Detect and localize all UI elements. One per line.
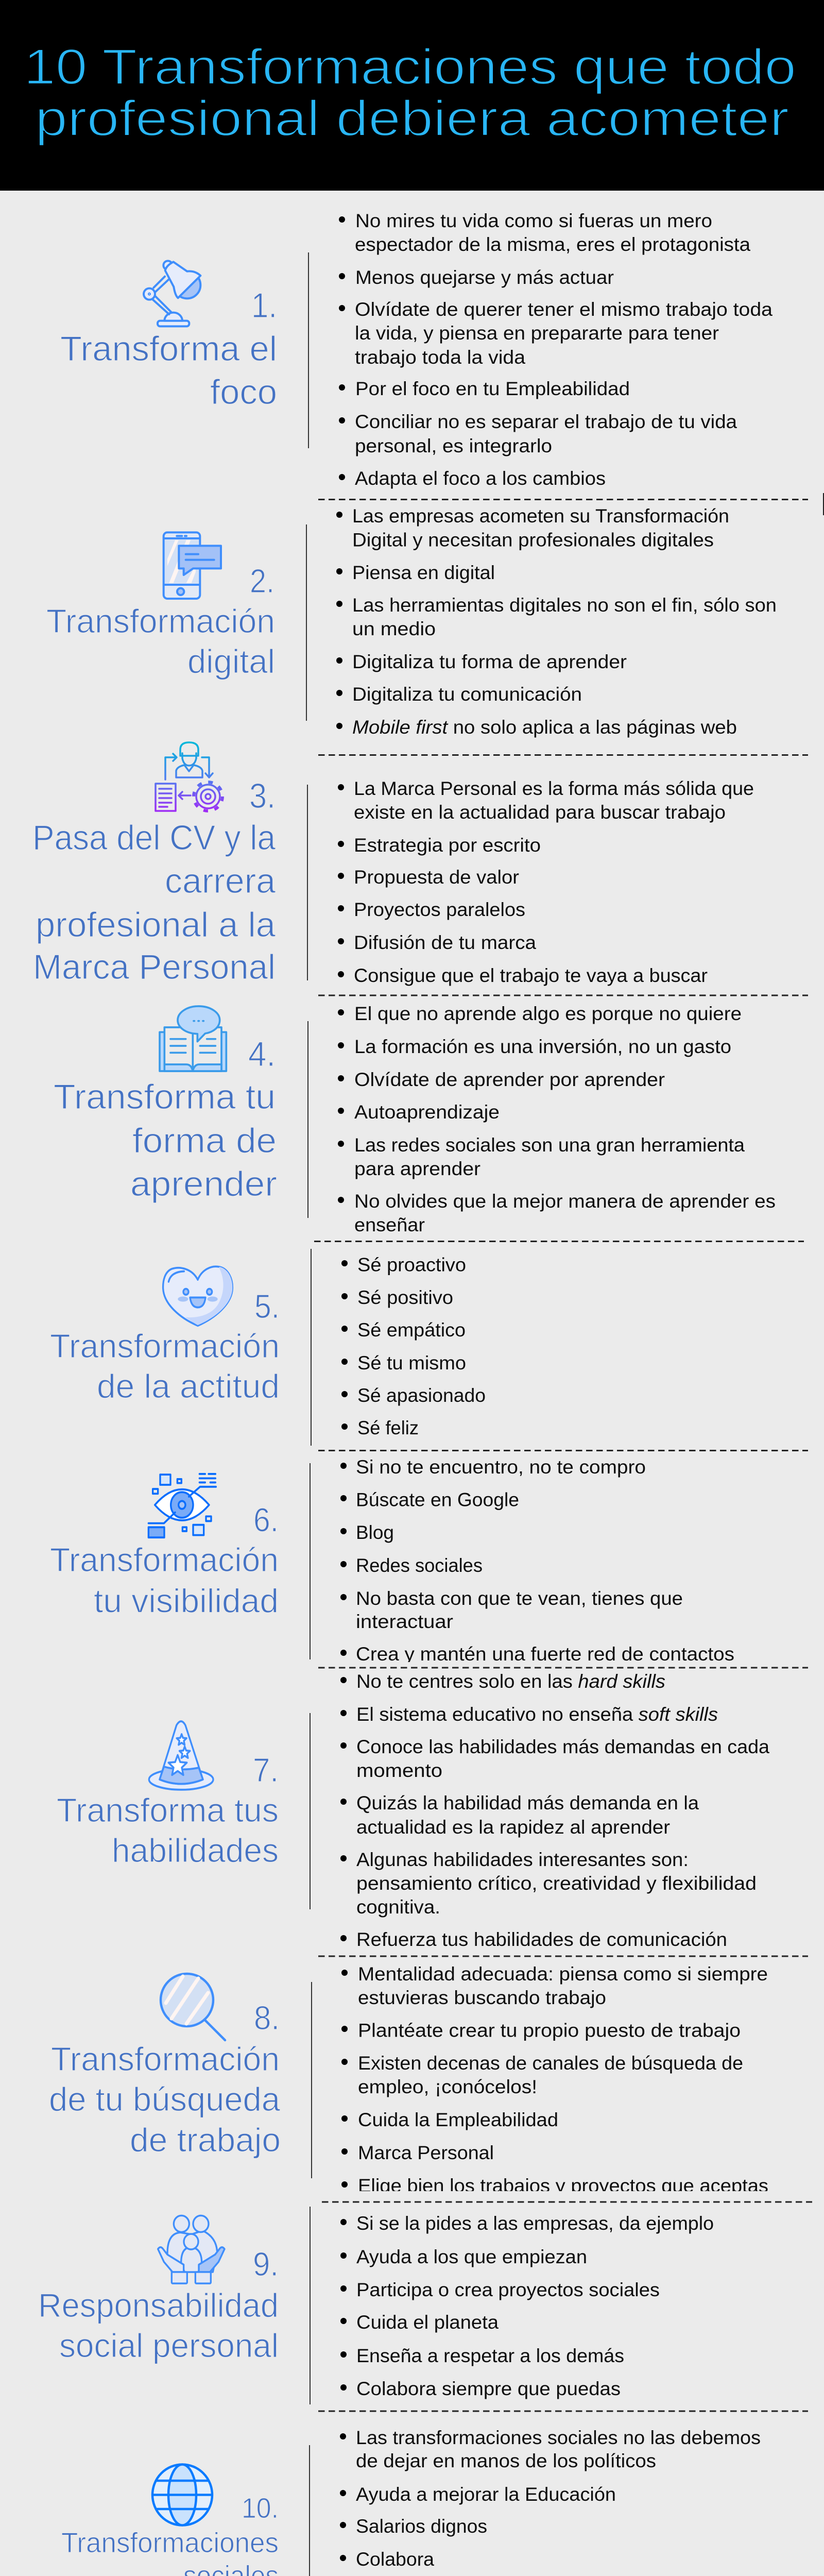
bullet list 5: Sé tu mismo	[357, 1352, 466, 1374]
bullet list 7: Algunas habilidades interesantes son:	[356, 1849, 689, 1870]
bullet list 6: interactuar	[356, 1611, 453, 1632]
heading 6: tu visibilidad	[94, 1582, 279, 1620]
title: profesional debiera acometer	[35, 90, 789, 146]
bullet list 9: Participa o crea proyectos sociales	[356, 2279, 660, 2300]
heading 2: 2.	[250, 562, 274, 600]
heading 4	[54, 1035, 277, 1204]
bullet list 7: cognitiva.	[356, 1896, 440, 1918]
heading 1: 1.	[251, 286, 277, 325]
bullet list 6: Si no te encuentro, no te compro	[356, 1456, 646, 1478]
heading 1	[60, 286, 277, 412]
bullet list 7: Quizás la habilidad más demanda en la	[356, 1792, 699, 1814]
bullet list 1	[339, 210, 772, 489]
bullet list 8: Existen decenas de canales de búsqueda de	[358, 2053, 743, 2074]
bullet list 1: Adapta el foco a los cambios	[355, 468, 606, 489]
bullet list 1: trabajo toda la vida	[355, 347, 525, 368]
bullet list 3: La Marca Personal es la forma más sólida que	[354, 778, 754, 799]
panel: section 5	[50, 1249, 486, 1446]
heading 3: Marca Personal	[33, 947, 276, 987]
panel: section 6	[50, 1456, 734, 1665]
icon: smiling heart	[163, 1266, 232, 1326]
bullet list 3: Estrategia por escrito	[354, 835, 541, 856]
bullet list 7	[340, 1671, 769, 1950]
heading 5: de la actitud	[97, 1367, 280, 1405]
bullet list 2: un medio	[352, 618, 436, 639]
bullet list 10	[340, 2427, 761, 2576]
bullet list 2: Digital y necesitan profesionales digitales	[352, 530, 714, 550]
bullet list 2: Mobile first no solo aplica a las páginas web	[352, 717, 737, 738]
bullet list 4: para aprender	[354, 1158, 480, 1179]
bullet list 9	[340, 2213, 714, 2399]
bullet list 4: La formación es una inversión, no un gasto	[354, 1036, 731, 1057]
panel: section 8	[49, 1963, 768, 2196]
bullet list 3: Proyectos paralelos	[354, 899, 525, 920]
bullet list 9: Ayuda a los que empiezan	[356, 2246, 587, 2267]
heading 2	[46, 562, 275, 680]
panel: section 3	[32, 742, 754, 987]
heading 8: 8.	[254, 1999, 280, 2037]
bullet list 10: Las transformaciones sociales no las debemos	[356, 2427, 761, 2448]
heading 4: 4.	[248, 1035, 276, 1074]
panel: section 4	[54, 1003, 776, 1235]
header banner	[0, 0, 824, 191]
bullet list 8: Cuida la Empleabilidad	[358, 2109, 558, 2130]
heading 7	[57, 1751, 279, 1869]
bullet list 10: Colabora	[356, 2549, 434, 2570]
bullet list 1: Conciliar no es separar el trabajo de tu vida	[355, 411, 737, 432]
bullet list 9: Cuida el planeta	[356, 2312, 499, 2333]
bullet list 7: No te centres solo en las hard skills	[356, 1671, 665, 1692]
heading 3: profesional a la	[36, 905, 276, 944]
bullet list 3: existe en la actualidad para buscar trabajo	[354, 802, 726, 823]
bullet list 8: Mentalidad adecuada: piensa como si siempre	[358, 1963, 768, 1985]
heading 5: 5.	[254, 1287, 280, 1325]
bullet list 4: No olvides que la mejor manera de aprender es	[354, 1191, 776, 1212]
bullet list 8: estuvieras buscando trabajo	[358, 1987, 606, 2008]
heading 9: Responsabilidad	[38, 2286, 279, 2324]
title: 10 Transformaciones que todo	[24, 39, 796, 95]
bullet list 4: enseñar	[354, 1214, 425, 1235]
bullet list 5: Sé feliz	[357, 1417, 419, 1438]
bullet list 6	[340, 1456, 734, 1665]
bullet list 3: Difusión de tu marca	[354, 932, 536, 953]
panel: section 10	[61, 2427, 761, 2576]
bullet list 4: Autoaprendizaje	[354, 1101, 500, 1123]
icon: magnifying glass	[161, 1974, 225, 2040]
bullet list 4: El que no aprende algo es porque no quiere	[354, 1003, 742, 1024]
icon: desk lamp	[144, 261, 200, 326]
heading 1: foco	[210, 372, 277, 412]
bullet list 6: No basta con que te vean, tienes que	[356, 1588, 683, 1609]
bullet list 1: la vida, y piensa en prepararte para tener	[355, 323, 719, 344]
bullet list 8: empleo, ¡conócelos!	[358, 2076, 537, 2097]
bullet list 5: Sé positivo	[357, 1287, 453, 1308]
bullet list 9: Enseña a respetar a los demás	[356, 2345, 624, 2366]
bullet list 2: Las empresas acometen su Transformación	[352, 505, 729, 527]
bullet list 3	[338, 778, 754, 986]
heading 8: de trabajo	[130, 2121, 281, 2159]
heading 6: Transformación	[50, 1541, 279, 1579]
panel: section 7	[57, 1671, 769, 1950]
bullet list 2: Las herramientas digitales no son el fin, sólo son	[352, 595, 777, 616]
bullet list 8	[341, 1963, 768, 2196]
icon: globe	[152, 2465, 212, 2526]
heading 5	[50, 1287, 280, 1405]
icon: person, CV and gear	[156, 742, 222, 811]
bullet list 6: Blog	[356, 1522, 394, 1543]
bullet list 5: Sé proactivo	[357, 1254, 466, 1276]
bullet list 9: Colabora siempre que puedas	[356, 2378, 621, 2399]
bullet list 4: Olvídate de aprender por aprender	[354, 1069, 665, 1090]
heading 8	[49, 1999, 281, 2159]
icon: wizard hat	[149, 1721, 213, 1790]
bullet list 9: Si se la pides a las empresas, da ejemplo	[356, 2213, 714, 2234]
heading 4: forma de	[132, 1121, 277, 1160]
heading 7: habilidades	[112, 1832, 279, 1869]
bullet list 2: Piensa en digital	[352, 562, 495, 583]
heading 1: Transforma el	[60, 329, 277, 368]
bullet list 7: momento	[356, 1760, 442, 1781]
icon: eye with data	[148, 1474, 216, 1537]
heading 5: Transformación	[50, 1327, 280, 1365]
heading 3: 3.	[249, 776, 276, 816]
bullet list 7: actualidad es la rapidez al aprender	[356, 1817, 670, 1838]
heading 10: 10.	[242, 2492, 279, 2524]
bullet list 5: Sé apasionado	[357, 1385, 486, 1406]
heading 4: Transforma tu	[54, 1077, 276, 1116]
heading 9	[38, 2245, 279, 2364]
heading 4: aprender	[130, 1164, 277, 1204]
bullet list 3: Consigue que el trabajo te vaya a buscar	[354, 965, 708, 986]
heading 9: social personal	[59, 2327, 279, 2364]
bullet list 7: pensamiento crítico, creatividad y flexibilidad	[356, 1873, 757, 1894]
heading 8: de tu búsqueda	[49, 2080, 281, 2118]
bullet list 10: Ayuda a mejorar la Educación	[356, 2484, 616, 2505]
bullet list 1: Menos quejarse y más actuar	[355, 267, 614, 288]
bullet list 5	[341, 1254, 486, 1438]
heading 3	[32, 776, 276, 987]
icon: phone with message	[164, 532, 221, 599]
bullet list 5: Sé empático	[357, 1319, 466, 1341]
heading 2: digital	[187, 642, 275, 680]
bullet list 1: Por el foco en tu Empleabilidad	[355, 378, 630, 399]
bullet list 4: Las redes sociales son una gran herramienta	[354, 1134, 745, 1156]
bullet list 8: Elige bien los trabajos y proyectos que aceptas	[358, 2175, 768, 2196]
bullet list 10: Salarios dignos	[356, 2516, 487, 2537]
heading 9: 9.	[253, 2245, 279, 2283]
bullet list 1: espectador de la misma, eres el protagonista	[355, 234, 750, 255]
bullet list 6: Búscate en Google	[356, 1489, 519, 1511]
bullet list 7: Refuerza tus habilidades de comunicación	[356, 1929, 727, 1950]
heading 8: Transformación	[51, 2040, 280, 2078]
bullet list 2: Digitaliza tu forma de aprender	[352, 651, 627, 672]
bullet list 4	[338, 1003, 776, 1235]
bullet list 1: personal, es integrarlo	[355, 435, 552, 456]
panel: section 1	[60, 210, 772, 489]
heading 3: Pasa del CV y la	[32, 818, 276, 857]
heading 7: Transforma tus	[57, 1791, 279, 1829]
heading 10: Transformaciones	[61, 2527, 279, 2558]
heading 6	[50, 1501, 279, 1620]
bullet list 8: Marca Personal	[358, 2142, 494, 2163]
bullet list 10: de dejar en manos de los políticos	[356, 2450, 656, 2471]
title	[24, 39, 796, 146]
panel: section 9	[38, 2207, 714, 2404]
icon: open book with speech bubble	[160, 1006, 226, 1071]
icon: family in caring hands	[158, 2215, 225, 2283]
heading 3: carrera	[165, 861, 276, 901]
heading 10	[61, 2492, 279, 2576]
heading 2: Transformación	[46, 602, 275, 640]
panel: section 2	[46, 505, 777, 738]
heading 7: 7.	[253, 1751, 279, 1789]
bullet list 1: No mires tu vida como si fueras un mero	[355, 210, 712, 231]
bullet list 2: Digitaliza tu comunicación	[352, 684, 582, 705]
bullet list 6: Crea y mantén una fuerte red de contactos	[356, 1643, 734, 1665]
bullet list 3: Propuesta de valor	[354, 867, 519, 888]
bullet list 7: El sistema educativo no enseña soft skills	[356, 1704, 718, 1725]
bullet list 2	[336, 505, 777, 738]
bullet list 8: Plantéate crear tu propio puesto de trabajo	[358, 2020, 741, 2041]
bullet list 6: Redes sociales	[356, 1555, 483, 1576]
bullet list 1: Olvídate de querer tener el mismo trabajo toda	[355, 299, 772, 320]
bullet list 7: Conoce las habilidades más demandas en cada	[356, 1736, 769, 1757]
heading 6: 6.	[253, 1501, 279, 1538]
